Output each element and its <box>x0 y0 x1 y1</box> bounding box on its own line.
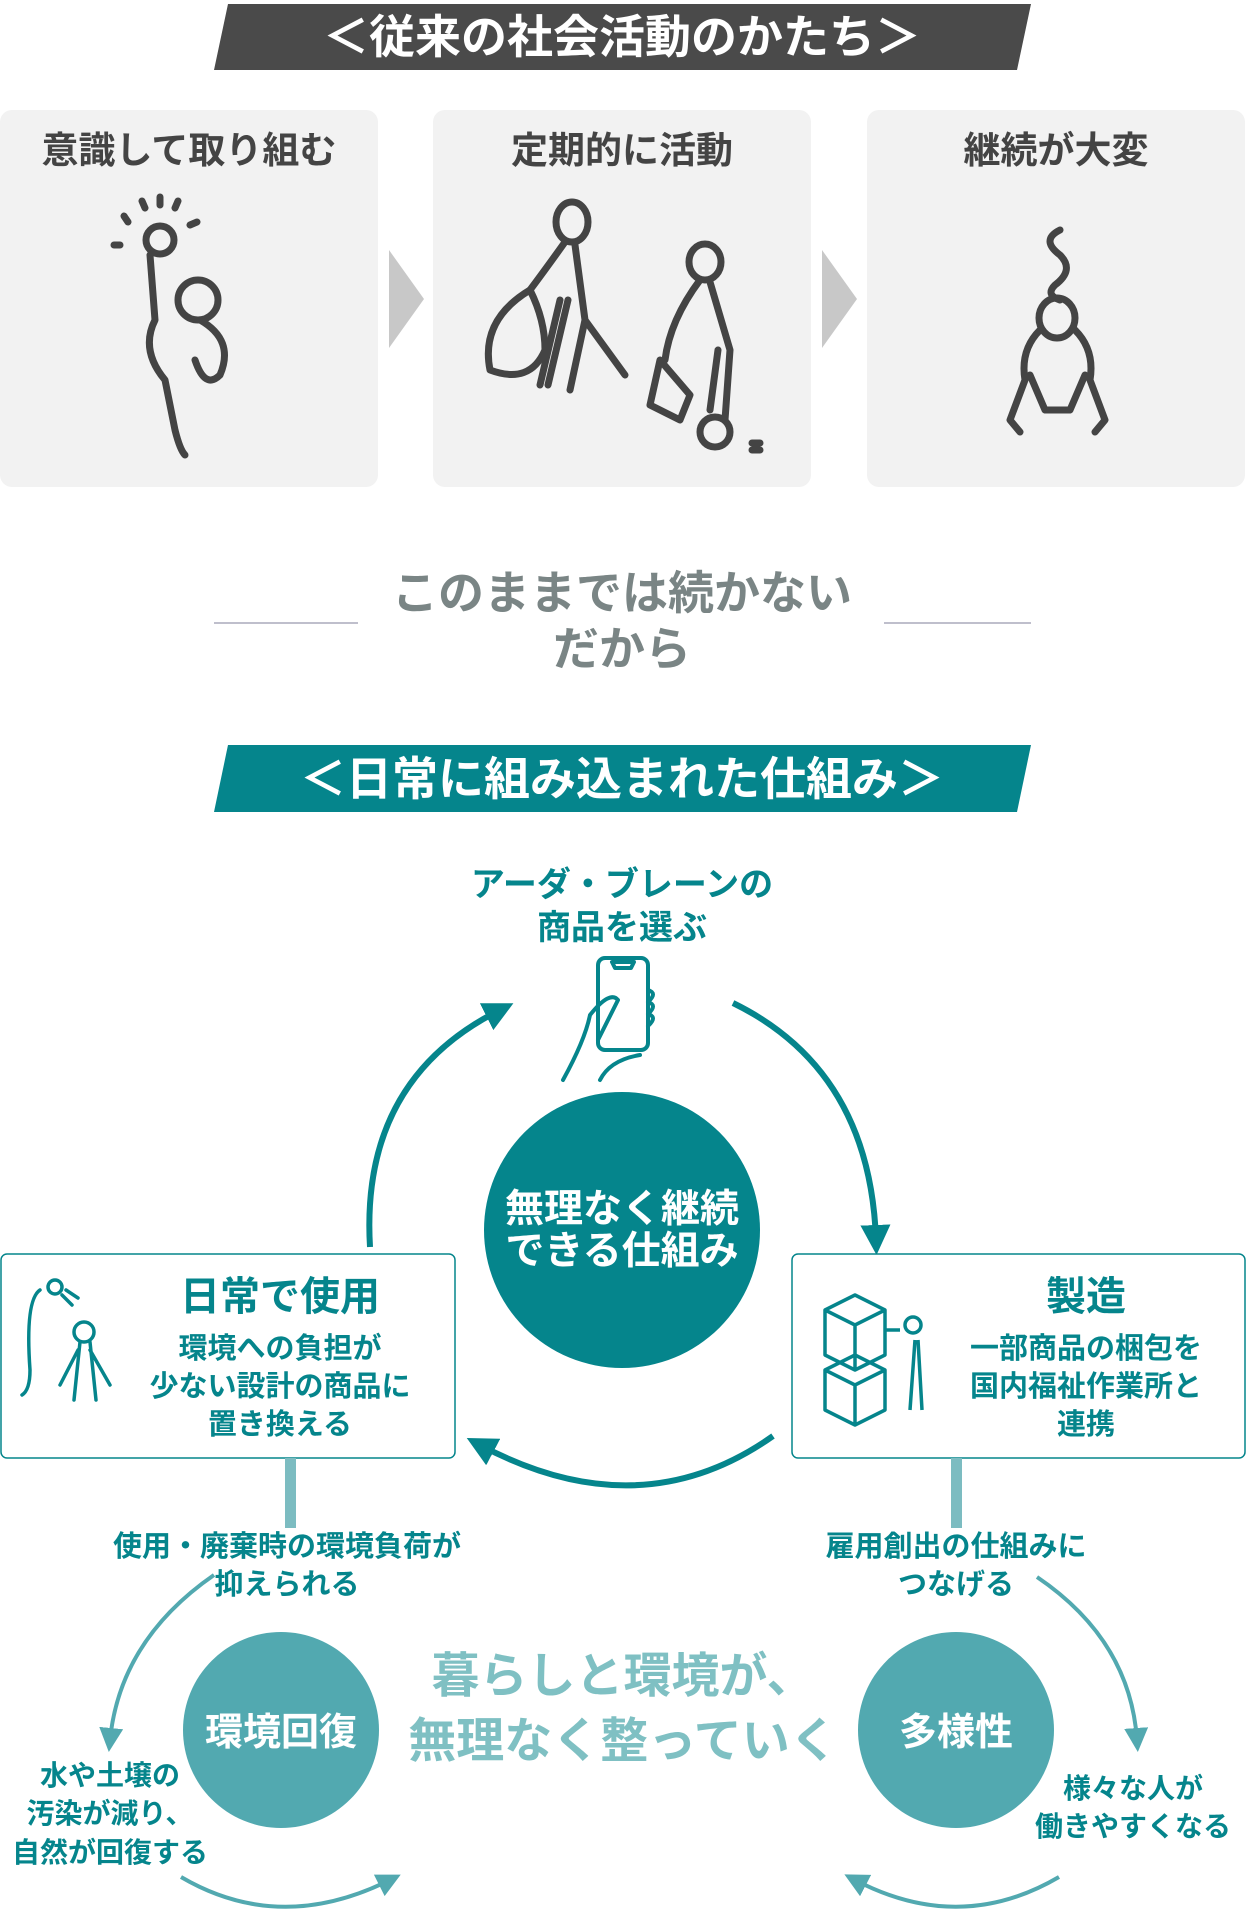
banner: daily system <box>214 745 1031 812</box>
arrow: left bottom <box>181 1877 390 1907</box>
arrow: left outer <box>110 1575 214 1740</box>
panel: 意識して取り組む <box>0 110 378 487</box>
text: アーダ・ブレーンの商品を選ぶ <box>471 865 773 947</box>
text: 水や土壌の汚染が減り: 汚染が減り、 <box>27 1797 193 1829</box>
panel: 製造: 一部商品の梱包を <box>970 1332 1202 1365</box>
icon: shower figure <box>22 1280 110 1400</box>
text: center slogan: 暮らしと環境が、 <box>431 1650 815 1703</box>
panel: 定期的に活動: 定期的に活動 <box>511 130 733 171</box>
text: 使用・廃棄時の環境負荷が抑えられる <box>113 1529 461 1601</box>
icon: tired sitting figure <box>1010 230 1105 432</box>
text: 様々な人が働きやすくなる <box>1035 1772 1231 1842</box>
icon: raised fist figure <box>114 197 224 455</box>
panel: 継続が大変: 継続が大変 <box>964 130 1148 171</box>
circle: 多様性 <box>858 1632 1054 1828</box>
banner: traditional: ＜従来の社会活動のかたち＞ <box>323 11 921 63</box>
panel: 製造: 連携 <box>1057 1408 1115 1441</box>
icon: smartphone in hand <box>563 958 653 1080</box>
text: 水や土壌の汚染が減り <box>12 1760 208 1868</box>
text: 様々な人が働きやすくなる: 様々な人が <box>1063 1772 1203 1804</box>
arrow: right bottom <box>855 1877 1059 1907</box>
arrow: gray chevron 2 <box>822 250 857 348</box>
arrow: cycle left up <box>369 1010 500 1247</box>
panel: 日常で使用: 置き換える <box>208 1408 352 1441</box>
arrow: cycle bottom <box>480 1436 773 1485</box>
text: 雇用創出の仕組みにつなげる <box>825 1530 1087 1601</box>
text: 雇用創出の仕組みにつなげる: 雇用創出の仕組みに <box>825 1530 1087 1563</box>
circle: 環境回復: 環境回復 <box>205 1712 357 1754</box>
panel: 継続が大変 <box>867 110 1245 487</box>
connector: left <box>285 1458 296 1528</box>
panel: 日常で使用: 環境への負担が <box>178 1331 382 1365</box>
text: 様々な人が働きやすくなる: 働きやすくなる <box>1035 1811 1231 1842</box>
text: 水や土壌の汚染が減り: 水や土壌の <box>40 1760 180 1791</box>
text: 雇用創出の仕組みにつなげる: つなげる <box>898 1568 1014 1601</box>
panel: 製造 <box>792 1254 1245 1458</box>
panel: 意識して取り組む: 意識して取り組む <box>42 130 336 171</box>
icon: cleaning figures <box>488 202 760 450</box>
text: アーダ・ブレーンの商品を選ぶ: アーダ・ブレーンの <box>471 865 773 904</box>
arrow: right outer <box>1037 1577 1137 1740</box>
panel: 日常で使用: 日常で使用 <box>180 1275 380 1319</box>
arrow: gray chevron 1 <box>389 250 424 348</box>
panel: 定期的に活動 <box>433 110 811 487</box>
banner: daily system: ＜日常に組み込まれた仕組み＞ <box>300 753 944 805</box>
text: 水や土壌の汚染が減り: 自然が回復する <box>12 1836 208 1868</box>
text: アーダ・ブレーンの商品を選ぶ: 商品を選ぶ <box>537 909 707 947</box>
text: 使用・廃棄時の環境負荷が抑えられる: 使用・廃棄時の環境負荷が <box>113 1529 461 1563</box>
text: 使用・廃棄時の環境負荷が抑えられる: 抑えられる <box>214 1568 360 1601</box>
circle: 無理なく継続できる仕組み: 無理なく継続 <box>505 1188 739 1231</box>
circle: 多様性: 多様性 <box>899 1712 1013 1754</box>
arrow: cycle right down <box>733 1003 876 1240</box>
text: center slogan: 無理なく整っていく <box>408 1715 838 1768</box>
text: このままでは続かない だから: このままでは続かない <box>392 567 852 619</box>
text: center slogan <box>408 1650 838 1768</box>
panel: 日常で使用: 少ない設計の商品に <box>149 1370 411 1403</box>
banner: traditional <box>214 4 1031 70</box>
icon: boxes and worker <box>825 1295 922 1425</box>
circle: 環境回復 <box>183 1632 379 1828</box>
panel: 製造: 国内福祉作業所と <box>970 1370 1202 1403</box>
panel: 日常で使用 <box>1 1254 455 1458</box>
text: このままでは続かない だから <box>214 567 1031 675</box>
circle: 無理なく継続できる仕組み <box>484 1092 760 1368</box>
panel: 製造: 製造 <box>1046 1275 1126 1319</box>
connector: right <box>951 1458 962 1528</box>
text: このままでは続かない だから: だから <box>553 623 691 675</box>
circle: 無理なく継続できる仕組み: できる仕組み <box>505 1230 739 1273</box>
